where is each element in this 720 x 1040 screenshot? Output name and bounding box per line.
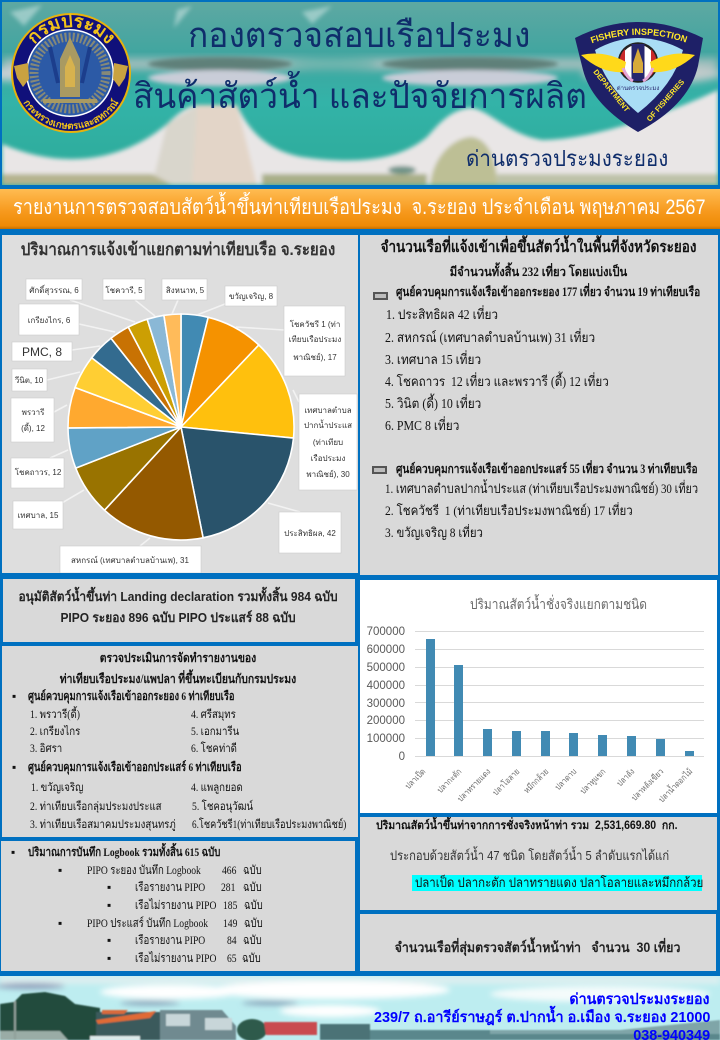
category labels: ปลาโอลาย <box>491 767 522 798</box>
Rayong piers list: 4. โชคถาวร 12 เที่ยว และพรวารี (ดี้) 12 เที่ยว <box>385 374 609 389</box>
icon: box bullet Rayong <box>373 292 388 300</box>
footer harbour scene <box>0 976 720 1040</box>
logbook rows: ฉบับ <box>242 951 261 965</box>
logbook rows: ฉบับ <box>243 880 262 894</box>
logbook rows: ▪ <box>107 951 111 965</box>
Prasae pier list: 4. แพลูกยอด <box>191 782 243 794</box>
panel heading: จำนวนเรือที่แจ้งเข้าเพื่อขึ้นสัตว์น้ำในพื้นที่จังหวัดระยอง <box>381 239 696 256</box>
data labels: ขวัญเจริญ, 8 <box>229 292 274 301</box>
header beach background <box>2 2 718 185</box>
category labels: ปลาน้ำดอกไม้ <box>655 765 695 804</box>
Rayong piers list: 3. เทศบาล 15 เที่ยว <box>385 352 481 367</box>
pie heading: ปริมาณการแจ้งเข้าแยกตามท่าเทียบเรือ จ.ระยอง <box>21 240 335 259</box>
data labels: เทียบเรือประมง <box>289 335 341 344</box>
gridlines <box>415 632 704 756</box>
Rayong piers list: 2. สหกรณ์ (เทศบาลตำบลบ้านเพ) 31 เที่ยว <box>385 330 595 345</box>
logbook rows: 466 <box>222 863 236 877</box>
icon: department of fisheries seal <box>11 13 131 133</box>
sampled boat count: จำนวนเรือที่สุ่มตรวจสัตว์น้ำหน้าท่า จำนวน 30 เที่ยว <box>395 940 680 955</box>
Prasae pier list <box>30 782 346 831</box>
logbook rows: ฉบับ <box>244 898 263 912</box>
logbook rows: ▪ <box>107 933 111 947</box>
category labels: ปลาทูแขก <box>578 767 608 797</box>
panel: actual weighed catch <box>360 817 717 910</box>
logbook rows: ▪ <box>58 863 62 877</box>
data labels: (ดี้), 12 <box>21 422 45 433</box>
panel: pier report evaluation <box>2 646 358 837</box>
y axis labels: 600000 <box>367 644 405 656</box>
logbook rows: เรือรายงาน PIPO <box>135 880 205 894</box>
footer address: 239/7 ถ.อารีย์ราษฎร์ ต.ปากน้ำ อ.เมือง จ.ระยอง 21000 <box>374 1009 710 1026</box>
Rayong pier list: 3. อิศรา <box>30 743 62 755</box>
icon: fishery inspection shield: FISHERY INSPECTION <box>590 28 688 44</box>
evaluation heading: ตรวจประเมินการจัดทำรายงานของ <box>100 651 256 665</box>
data labels: เกรียงไกร, 6 <box>28 316 71 325</box>
data labels: สหกรณ์ (เทศบาลตำบลบ้านเพ), 31 <box>71 555 189 565</box>
Prasae piers list: 2. โชควัชรี 1 (ท่าเทียบเรือประมงพาณิชย์) 17 เที่ยว <box>385 503 633 518</box>
data labels: พาณิชย์), 17 <box>293 352 337 362</box>
logbook rows: ฉบับ <box>243 933 262 947</box>
logbook rows: ▪ <box>107 880 111 894</box>
panel: bar chart of catch by species <box>360 580 717 813</box>
heading: main title line 1: กองตรวจสอบเรือประมง <box>188 16 530 55</box>
icon: fishery inspection shield <box>575 22 703 132</box>
data labels: PMC, 8 <box>22 345 62 359</box>
panel: pie chart of landings by pier <box>2 235 358 573</box>
Rayong piers list: 5. วินิต (ดี้) 10 เที่ยว <box>385 396 481 411</box>
category labels: หมึกกล้วย <box>522 767 551 795</box>
icon: fishery inspection shield: DEPARTMENT <box>593 69 630 112</box>
y axis labels: 300000 <box>367 698 405 710</box>
logbook rows: 84 <box>227 933 237 947</box>
Prasae pier list: 1. ขวัญเจริญ <box>31 782 83 794</box>
leader lines <box>47 300 300 546</box>
data labels: ประสิทธิผล, 42 <box>284 529 336 538</box>
Rayong piers list: 1. ประสิทธิผล 42 เที่ยว <box>386 307 498 322</box>
report title text: รายงานการตรวจสอบสัตว์น้ำขึ้นท่าเทียบเรือประมง จ.ระยอง ประจำเดือน พฤษภาคม 2567 <box>13 196 706 219</box>
data labels: เทศบาล, 15 <box>18 511 59 520</box>
category labels: ปลาลัง <box>615 767 637 788</box>
species composition: ประกอบด้วยสัตว์น้ำ 47 ชนิด โดยสัตว์น้ำ 5 ลำดับแรกได้แก่ <box>390 848 669 863</box>
bars <box>426 639 694 756</box>
Prasae piers list <box>385 479 698 540</box>
highlighted top species <box>412 875 702 891</box>
category labels: ปลาทรายแดง <box>455 767 493 804</box>
logbook rows: ▪ <box>107 898 111 912</box>
logbook rows: 65 <box>227 951 237 965</box>
logbook rows: 149 <box>223 916 237 930</box>
Rayong piers list: 6. PMC 8 เที่ยว <box>385 418 459 433</box>
category labels <box>402 765 695 804</box>
logbook rows: PIPO ประแสร์ บันทึก Logbook <box>87 916 208 930</box>
logbook rows: เรือไม่รายงาน PIPO <box>135 951 216 965</box>
panel: pier report evaluation: ศูนย์ควบคุมการแจ้งเรือเข้าออกประแสร์ 6 ท่าเทียบเรือ <box>28 760 242 774</box>
Rayong pier list: 6. โชคท่าดี <box>191 743 237 755</box>
sub heading: station name: ด่านตรวจประมงระยอง <box>466 146 668 171</box>
logbook rows: เรือไม่รายงาน PIPO <box>135 898 216 912</box>
logbook rows: ฉบับ <box>244 916 263 930</box>
panel: logbook records <box>1 841 355 971</box>
logbook rows: ▪ <box>58 916 62 930</box>
category labels: ปลาหลังเขียว <box>629 767 666 803</box>
Prasae piers list: 3. ขวัญเจริญ 8 เที่ยว <box>385 525 483 540</box>
data labels: พาณิชย์), 30 <box>306 469 350 479</box>
species names: ปลาเป็ด ปลากะตัก ปลาทรายแดง ปลาโอลายและหมึกกล้วย <box>415 875 703 890</box>
Prasae piers list: 1. เทศบาลตำบลปากน้ำประแส (ท่าเทียบเรือประมงพาณิชย์) 30 เที่ยว <box>385 481 698 496</box>
Prasae pier list: 6.โชควัชรี1(ท่าเทียบเรือประมงพาณิชย์) <box>192 819 346 831</box>
heading: main title line 2: สินค้าสัตว์น้ำ และปัจจัยการผลิต <box>133 77 587 116</box>
footer station name: ด่านตรวจประมงระยอง <box>570 991 710 1008</box>
Rayong pier list <box>30 706 239 755</box>
Prasae pier list: 2. ท่าเทียบเรือกลุ่มประมงประแส <box>30 801 162 813</box>
pie slices <box>68 314 294 540</box>
landing declaration total: อนุมัติสัตว์น้ำขึ้นท่า Landing declaration รวมทั้งสิ้น 984 ฉบับ <box>18 589 338 604</box>
Rayong pier list: 5. เอกมารีน <box>191 726 239 738</box>
Prasae heading with bullet: ▪ <box>12 760 16 774</box>
category labels: ปลาดาบ <box>553 767 579 792</box>
panel: landing declaration approvals <box>3 579 355 642</box>
PIPO breakdown: PIPO ระยอง 896 ฉบับ PIPO ประแสร์ 88 ฉบับ <box>60 610 296 625</box>
data labels: โชคถาวร, 12 <box>15 467 62 477</box>
category labels: ปลากะตัก <box>435 767 464 795</box>
data labels: วีนิต, 10 <box>14 376 44 385</box>
panel: sampled boats <box>360 914 716 971</box>
Rayong pier list: 2. เกรียงไกร <box>30 726 80 738</box>
total line: มีจำนวนทั้งสิ้น 232 เที่ยว โดยแบ่งเป็น <box>450 265 627 279</box>
logbook rows: 281 <box>221 880 235 894</box>
logbook rows: 185 <box>223 898 237 912</box>
icon: box bullet Prasae <box>372 466 387 474</box>
y axis labels <box>367 626 405 763</box>
Rayong heading with bullet <box>12 689 235 704</box>
Prasae heading with bullet <box>12 760 242 775</box>
logbook total: ▪ <box>11 845 15 859</box>
icon: fishery inspection shield: ด่านตรวจประมง <box>617 85 659 92</box>
category labels: ปลาเป็ด <box>402 766 428 791</box>
Prasae pier list: 3. ท่าเทียบเรือสมาคมประมงสุนทรภู่ <box>30 819 176 831</box>
pie chart <box>10 278 358 573</box>
total weight: ปริมาณสัตว์น้ำขึ้นท่าจากการชั่งจริงหน้าท่า รวม 2,531,669.80 กก. <box>376 820 677 832</box>
data labels: เทศบาลตำบล <box>304 406 352 415</box>
header banner <box>2 2 718 185</box>
footer harbour photo with address <box>0 976 720 1040</box>
logbook rows: ฉบับ <box>243 863 262 877</box>
Rayong heading with bullet: ▪ <box>12 689 16 703</box>
Prasae pier list: 5. โชคอนุวัฒน์ <box>192 801 253 813</box>
logbook rows <box>58 863 263 965</box>
evaluation heading <box>60 651 296 686</box>
data labels: ศักดิ์สุวรรณ, 6 <box>29 284 79 295</box>
data labels: สิงหนาท, 5 <box>166 286 205 295</box>
data labels <box>11 279 357 573</box>
evaluation heading: ท่าเทียบเรือประมง/แพปลา ที่ขึ้นทะเบียนกับกรมประมง <box>60 672 296 686</box>
panel: pier report evaluation: ศูนย์ควบคุมการแจ้งเรือเข้าออกระยอง 6 ท่าเทียบเรือ <box>28 689 235 703</box>
Rayong pier list: 1. พรวารี(ดี้) <box>30 709 80 721</box>
Prasae centre heading: ศูนย์ควบคุมการแจ้งเรือเข้าออกประแสร์ 55 เที่ยว จำนวน 3 ท่าเทียบเรือ <box>396 462 698 476</box>
data labels: พรวารี <box>22 408 45 417</box>
logbook rows: เรือรายงาน PIPO <box>135 933 205 947</box>
y axis labels: 700000 <box>367 626 405 638</box>
data labels: (ท่าเทียบ <box>313 438 343 447</box>
data labels: โชควารี, 5 <box>105 285 143 295</box>
Rayong pier list: 4. ศรีสมุทร <box>191 709 236 721</box>
panel: boats notified by control centre <box>360 235 718 575</box>
Rayong piers list <box>385 305 609 433</box>
bar chart <box>366 594 704 804</box>
orange report title bar <box>0 189 720 229</box>
y axis labels: 0 <box>399 751 405 763</box>
icon: department of fisheries seal: กระทรวงเกษตรและสหกรณ์ <box>24 97 118 130</box>
data labels: ปากน้ำประแส <box>304 419 352 430</box>
logbook rows: PIPO ระยอง บันทึก Logbook <box>87 863 201 877</box>
data labels: โชควัชรี 1 (ท่า <box>290 319 340 329</box>
data labels: เรือประมง <box>311 454 345 463</box>
chart title: ปริมาณสัตว์น้ำชั่งจริงแยกตามชนิด <box>470 594 647 612</box>
logbook total <box>11 842 220 859</box>
y axis labels: 400000 <box>367 680 405 692</box>
y axis labels: 500000 <box>367 662 405 674</box>
icon: fishery inspection shield: OF FISHERIES <box>647 80 684 121</box>
y axis labels: 200000 <box>367 715 405 727</box>
Rayong centre heading: ศูนย์ควบคุมการแจ้งเรือเข้าออกระยอง 177 เที่ยว จำนวน 19 ท่าเทียบเรือ <box>396 285 700 299</box>
y axis labels: 100000 <box>367 733 405 745</box>
panel: logbook records: ปริมาณการบันทึก Logbook รวมทั้งสิ้น 615 ฉบับ <box>28 845 220 859</box>
